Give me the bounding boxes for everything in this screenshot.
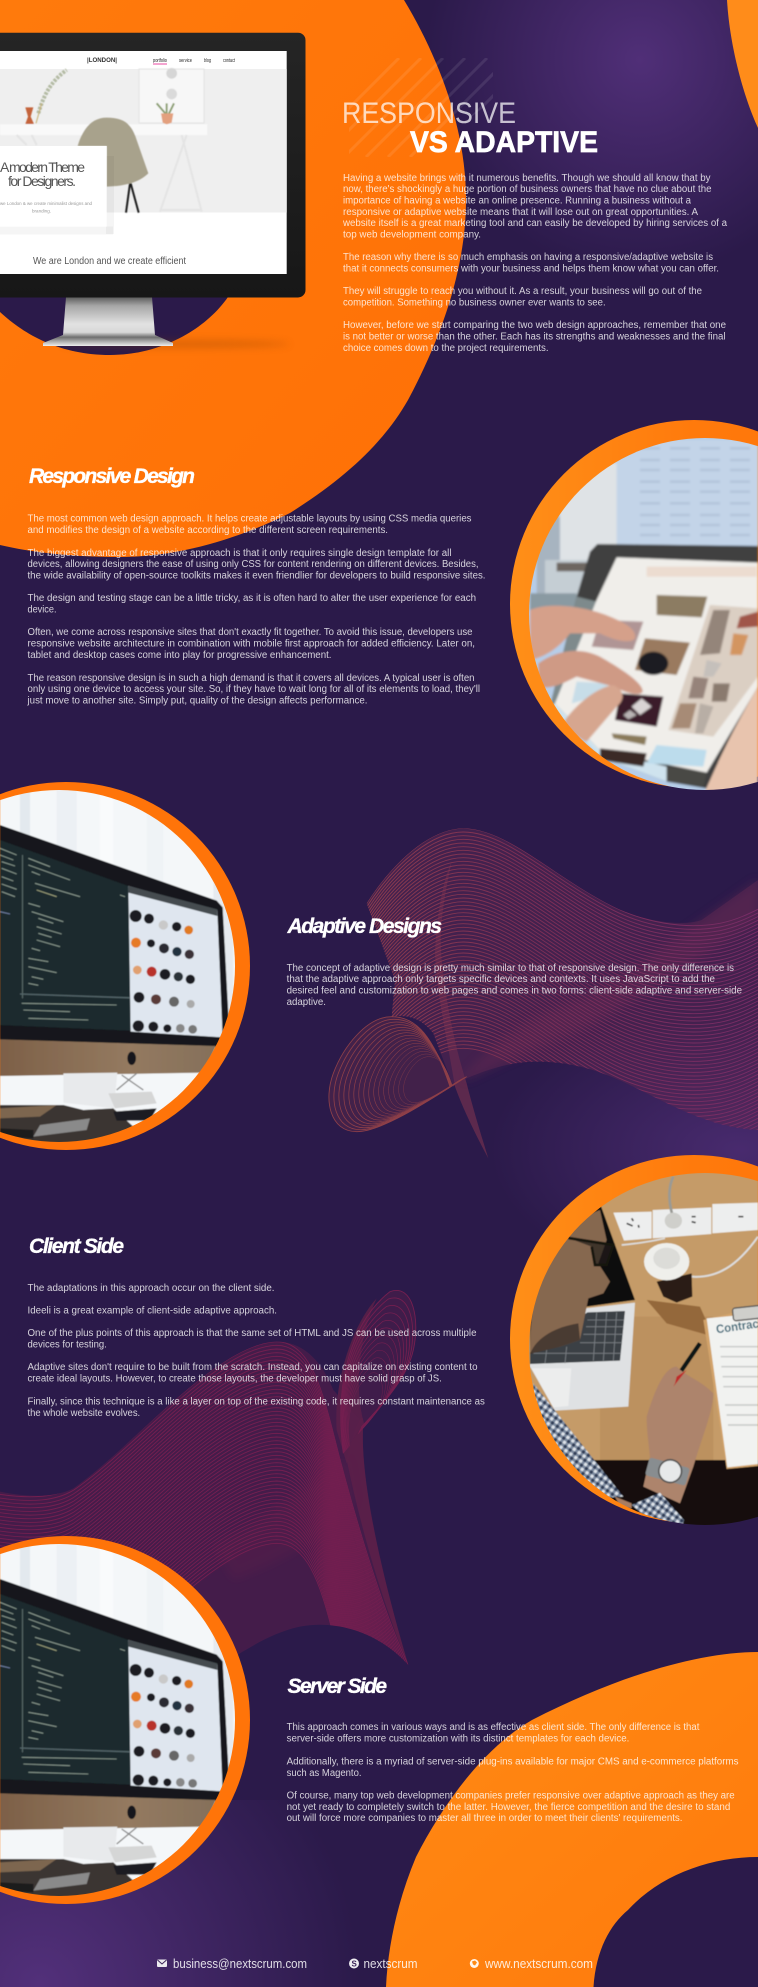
text block: server side: such as Magento. xyxy=(287,1768,362,1779)
purple blob behind stand xyxy=(0,290,228,355)
text block: introduction: importance of having a website an online presence. Running a business without a xyxy=(343,196,692,206)
monitor stand xyxy=(43,297,173,346)
orange blob: top-right corner xyxy=(727,0,758,128)
orange arc: bottom-right xyxy=(386,1652,758,1987)
hero card: for Designers. xyxy=(8,173,76,189)
text block: client side: Adaptive sites don't require to be built from the scratch. Instead, you can capitalize on existing content to xyxy=(28,1362,478,1373)
hero card: A modern Theme xyxy=(0,159,85,175)
text block: adaptive designs: adaptive. xyxy=(287,997,326,1008)
icon: envelope xyxy=(157,1960,167,1967)
heading: server side: Server Side xyxy=(288,1675,387,1698)
text block: introduction: They will struggle to reach you without it. As a result, your business will go out of the xyxy=(343,286,702,297)
site header text: |LONDON| xyxy=(87,58,117,64)
text block: responsive design: The biggest advantage of responsive approach is that it only requires single design template for all xyxy=(28,548,452,559)
text block: adaptive designs: The concept of adaptive design is pretty much similar to that of responsive design. The only difference is xyxy=(287,963,734,974)
text block: client side: One of the plus points of this approach is that the same set of HTML and JS can be used across multiple xyxy=(28,1328,476,1339)
text block: client side: The adaptations in this approach occur on the client side. xyxy=(28,1283,274,1294)
site header text: service xyxy=(179,58,192,64)
heading: adaptive designs: Adaptive Designs xyxy=(286,915,442,938)
text block: server side: not yet ready to completely switch to the latter. However, the fierce competition and the desire to stand xyxy=(287,1802,730,1813)
text block: introduction: that it connects consumers with your business and helps them know what you can offer. xyxy=(343,264,719,274)
text block: client side xyxy=(28,1283,485,1419)
text block: responsive design: tablet and desktop cases come into play for progressive enhancement. xyxy=(28,650,332,661)
text block: responsive design: and modifies the design of a website according to the different screen requirements. xyxy=(28,525,388,536)
text block: introduction xyxy=(342,173,728,354)
text block: responsive design: The design and testing stage can be a little tricky, as it is often hard to alter the user experience for each xyxy=(28,593,476,604)
heading: client side: Client Side xyxy=(29,1235,124,1258)
text block: client side: Ideeli is a great example of client-side adaptive approach. xyxy=(28,1306,277,1316)
ground shadow xyxy=(60,340,290,348)
circle photo: code monitor xyxy=(0,780,255,1155)
text block: responsive design: The reason responsive design is in such a high demand is that it covers all devices. A typical user is often xyxy=(28,673,474,684)
text block: adaptive designs: desired feel and customization to web pages and comes in two forms: client-side adaptive and server-side xyxy=(287,986,742,996)
text block: responsive design: devices, allowing designers the ease of using only CSS for content rendering on different devices. Besides, xyxy=(28,559,478,570)
icon: globe xyxy=(470,1959,479,1968)
text block: server side: out will force more companies to master all three in order to meet their clients' requirements. xyxy=(287,1813,682,1824)
wave line art: client side section xyxy=(0,1280,430,1867)
email: business@nextscrum.com xyxy=(173,1957,307,1971)
diagonal stripes behind title xyxy=(349,58,493,157)
site header text: portfolio xyxy=(153,58,167,64)
text block: server side: Of course, many top web development companies prefer responsive over adaptive approach as they are xyxy=(287,1790,735,1802)
text block: introduction: responsive or adaptive website means that it will lose out on great opportunities. A xyxy=(343,207,699,218)
monitor mockup xyxy=(0,33,306,355)
text block: responsive design: Often, we come across responsive sites that don't exactly fit together. To avoid this issue, developers use xyxy=(28,627,472,638)
text block: introduction: choice comes down to the project requirements. xyxy=(343,343,549,354)
circle photo: desk with laptop and contract xyxy=(500,1150,758,1533)
footer contacts xyxy=(157,1957,593,1971)
hero card xyxy=(0,146,107,227)
orange blob: top-left hero shape xyxy=(0,0,466,557)
text block: responsive design: responsive website architecture in combination with mobile first approach for added efficiency. Later on, xyxy=(28,638,475,650)
text block: server side: server-side offers more customization with its distinct templates for each device. xyxy=(287,1734,629,1744)
text block: introduction: is not better or worse than the other. Each has its strengths and weaknesses and the final xyxy=(343,332,726,342)
text block: server side: This approach comes in various ways and is as effective as client side. The only difference is that xyxy=(287,1722,700,1733)
text block: responsive design: device. xyxy=(28,604,56,616)
icon: skype: S xyxy=(352,1960,358,1969)
text block: introduction: However, before we start comparing the two web design approaches, remember that one xyxy=(343,320,726,331)
text block: adaptive designs: that the adaptive approach only targets specific devices and contexts. It uses JavaScript to add the xyxy=(287,974,715,985)
hero card: we London & we create minimalist designs and xyxy=(0,201,92,206)
title: RESPONSIVE xyxy=(342,97,516,130)
text block: server side: Additionally, there is a myriad of server-side plug-ins available for major CMS and e-commerce platforms xyxy=(287,1756,739,1768)
screen tagline: We are London and we create efficient xyxy=(33,256,186,267)
text block: introduction: competition. Something no business owner ever wants to see. xyxy=(343,298,606,308)
text block: responsive design: just move to another site. Simply put, quality of the design affects performance. xyxy=(26,696,367,706)
text block: client side: devices for testing. xyxy=(28,1340,107,1350)
text block: adaptive designs xyxy=(287,963,742,1008)
text block: introduction: website itself is a great marketing tool and can easily be developed by hiring services of a xyxy=(342,218,728,229)
title: VS ADAPTIVE xyxy=(410,126,598,159)
site header text: blog xyxy=(204,58,211,64)
text block: responsive design: only using one device to access your site. So, if they have to wait long for all of its elements to load, they'll xyxy=(28,684,480,695)
skype handle: nextscrum xyxy=(364,1957,418,1971)
text block: responsive design: The most common web design approach. It helps create adjustable layouts by using CSS media queries xyxy=(28,514,472,524)
text block: responsive design xyxy=(26,514,485,706)
site header text xyxy=(87,58,235,64)
title xyxy=(342,97,598,159)
text block: responsive design: the wide availability of open-source toolkits makes it even friendlier for developers to build responsive sites. xyxy=(28,570,486,582)
wave line art: adaptive section xyxy=(320,820,758,1160)
heading: responsive design: Responsive Design xyxy=(29,465,195,488)
monitor screen xyxy=(0,51,287,274)
text block: client side: create ideal layouts. However, to create those layouts, the developer must have solid grasp of JS. xyxy=(28,1374,442,1384)
text block: introduction: The reason why there is so much emphasis on having a responsive/adaptive website is xyxy=(343,252,713,263)
website: www.nextscrum.com xyxy=(484,1957,593,1971)
circle photo: code monitor (repeat) xyxy=(0,1534,255,1909)
hero card: branding. xyxy=(32,208,51,214)
text block: client side: Finally, since this technique is a like a layer on top of the existing code, it requires constant maintenance as xyxy=(28,1396,485,1408)
text block: introduction: Having a website brings with it numerous benefits. Though we should all know that by xyxy=(343,173,711,184)
monitor frame xyxy=(0,33,306,297)
site header text: contact xyxy=(223,58,235,64)
circle photo: tablet xyxy=(500,420,758,795)
text block: introduction: now, there's shockingly a huge portion of business owners that have no clue about the xyxy=(343,184,712,195)
text block: client side: the whole website evolves. xyxy=(28,1408,140,1419)
text block: server side xyxy=(287,1722,739,1824)
icon: skype xyxy=(349,1958,359,1969)
text block: introduction: top web development company. xyxy=(343,230,481,240)
